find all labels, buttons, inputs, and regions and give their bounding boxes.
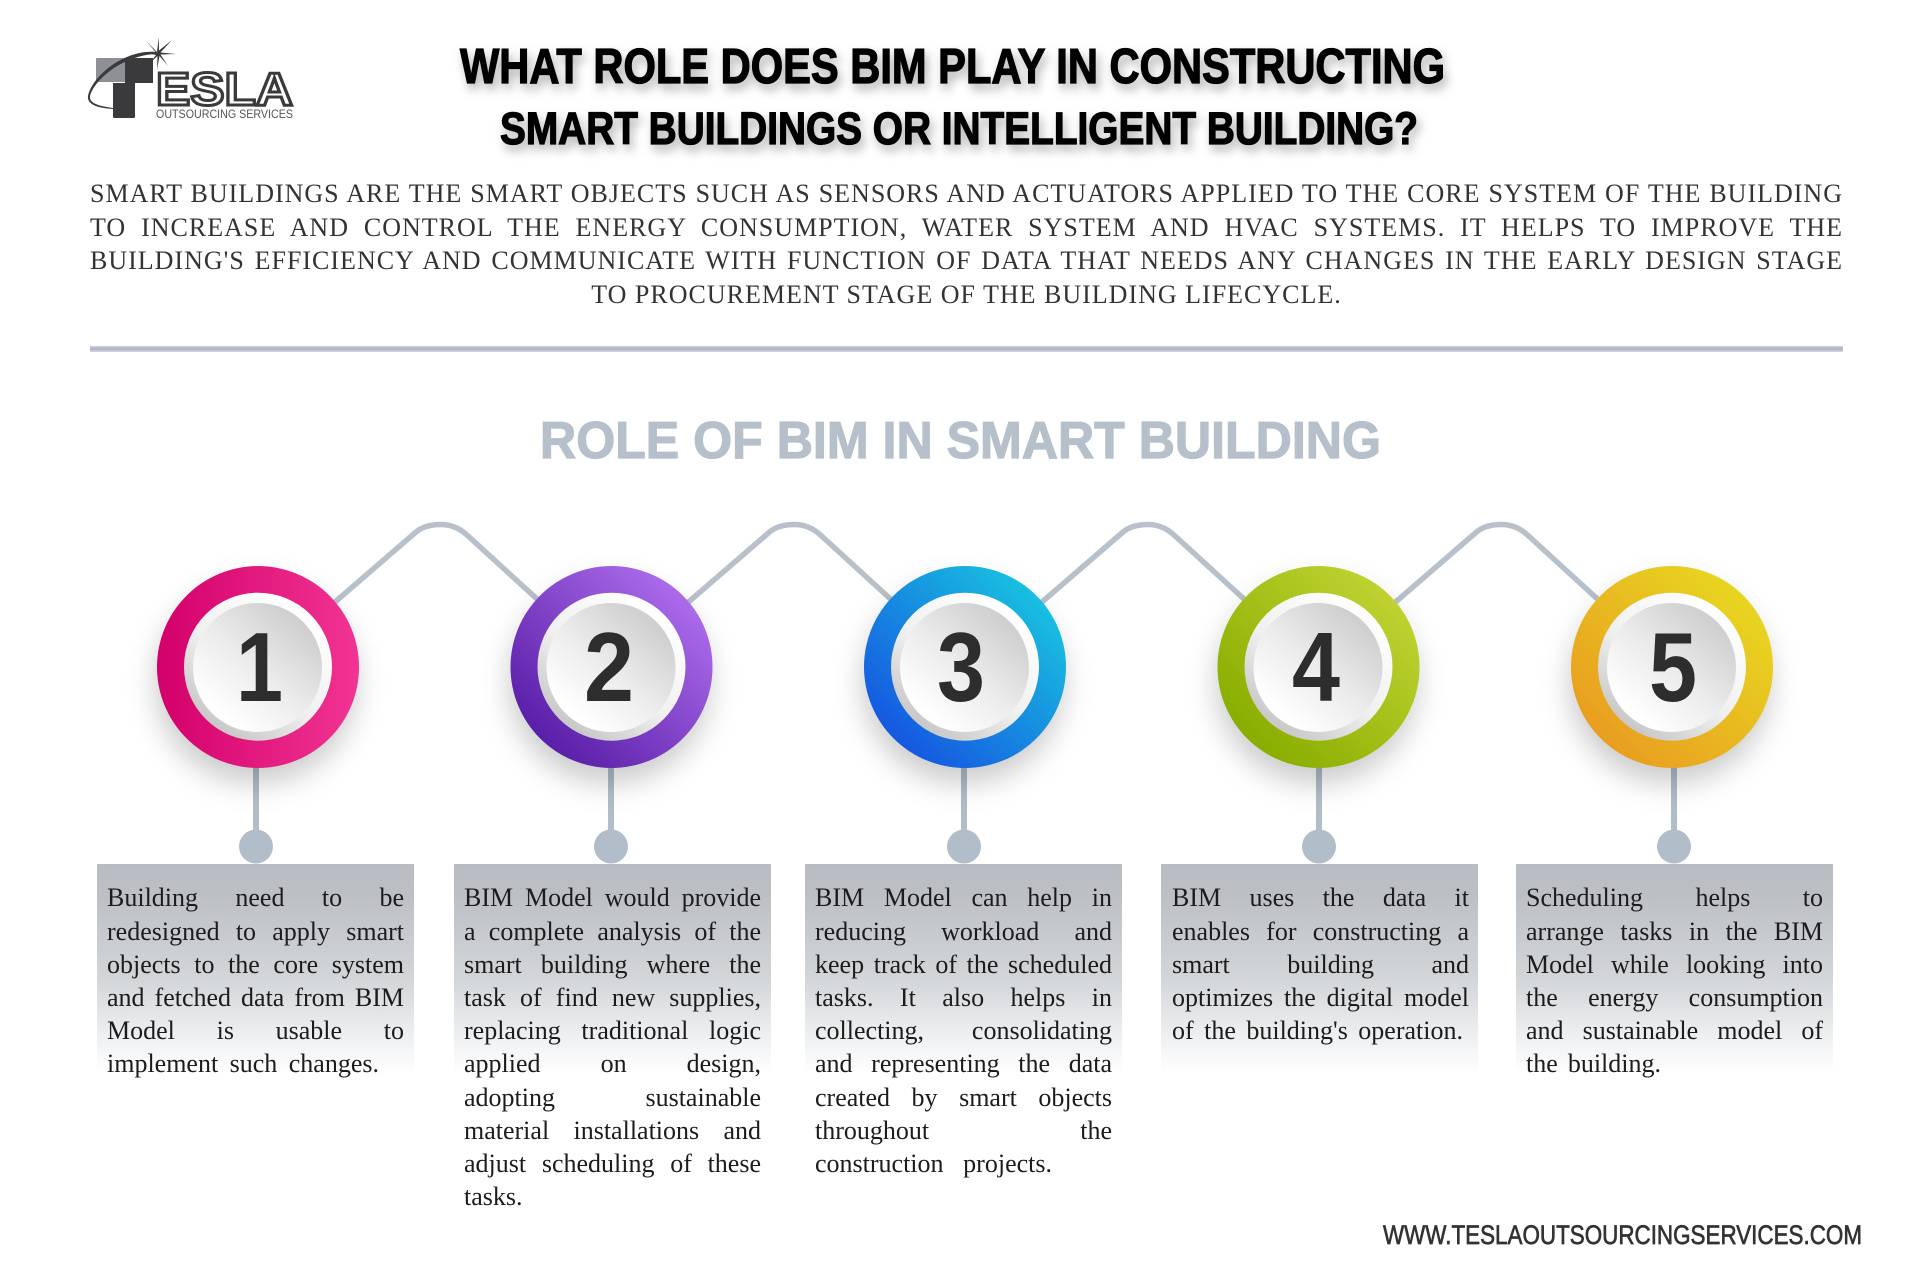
- panel: step 3 text: BIM Model can help in: [815, 883, 1112, 912]
- panel: step 1 text: objects to the core system: [107, 950, 404, 979]
- intro paragraph: BUILDING'S EFFICIENCY AND COMMUNICATE WITH FUNCTION OF DATA THAT NEEDS ANY CHANGES IN THE EARLY DESIGN STAGE: [90, 246, 1843, 275]
- panel: step 1 text: Building need to be: [107, 883, 404, 912]
- panel: step 3 text: construction projects.: [815, 1149, 1052, 1178]
- intro paragraph: [90, 179, 1843, 309]
- panel: step 2 text: task of find new supplies,: [464, 983, 761, 1012]
- panel: step 2 text: adopting sustainable: [464, 1083, 761, 1112]
- step 4 marker: 4: [1292, 612, 1340, 722]
- panel: step 4 text: BIM uses the data it: [1172, 883, 1469, 912]
- panel: step 2 text: BIM Model would provide: [464, 883, 761, 912]
- logo: Tesla Outsourcing Services: [88, 37, 294, 121]
- panel: step 2 text: smart building where the: [464, 950, 761, 979]
- panel: step 3 text: collecting, consolidating: [815, 1016, 1112, 1045]
- panel: step 4 text: [1161, 864, 1478, 1056]
- panel: step 5 text: the building.: [1526, 1049, 1661, 1078]
- panel: step 4 text: optimizes the digital model: [1172, 983, 1469, 1012]
- panel: step 5 text: [1516, 864, 1833, 1078]
- panel: step 3 text: tasks. It also helps in: [815, 983, 1112, 1012]
- panel: step 5 text: and sustainable model of: [1526, 1016, 1823, 1045]
- panel: step 3 text: throughout the: [815, 1116, 1112, 1145]
- panel: step 2 text: [454, 864, 771, 1211]
- panel: step 1 text: redesigned to apply smart: [107, 916, 404, 946]
- panel: step 5 text: Scheduling helps to: [1526, 883, 1823, 912]
- step 1 marker: [157, 566, 359, 864]
- title: [458, 40, 1452, 156]
- logo: Tesla Outsourcing Services: ESLA: [156, 63, 293, 115]
- step 5 marker: 5: [1649, 612, 1697, 722]
- title: SMART BUILDINGS OR INTELLIGENT BUILDING?: [500, 103, 1418, 154]
- panel: step 3 text: keep track of the scheduled: [815, 950, 1112, 979]
- step 3 marker: [864, 566, 1066, 864]
- panel: step 2 text: tasks.: [464, 1182, 522, 1211]
- panel: step 5 text: Model while looking into: [1526, 950, 1823, 979]
- panel: step 2 text: replacing traditional logic: [464, 1016, 761, 1045]
- panel: step 1 text: [97, 864, 414, 1078]
- section heading: ROLE OF BIM IN SMART BUILDING: [540, 412, 1381, 470]
- step 5 marker: [1571, 566, 1773, 864]
- panel: step 2 text: applied on design,: [464, 1049, 761, 1078]
- panel: step 5 text: arrange tasks in the BIM: [1526, 916, 1823, 946]
- panel: step 4 text: of the building's operation.: [1172, 1016, 1463, 1045]
- process timeline: [142, 522, 1784, 864]
- panel: step 1 text: and fetched data from BIM: [107, 983, 404, 1012]
- panel: step 1 text: implement such changes.: [107, 1049, 379, 1078]
- intro paragraph: TO PROCUREMENT STAGE OF THE BUILDING LIFECYCLE.: [591, 280, 1342, 309]
- divider: [90, 346, 1843, 352]
- step 2 marker: [510, 566, 712, 864]
- intro paragraph: TO INCREASE AND CONTROL THE ENERGY CONSUMPTION, WATER SYSTEM AND HVAC SYSTEMS. IT HELPS TO IMPROVE THE: [90, 213, 1843, 242]
- panel: step 4 text: smart building and: [1172, 950, 1469, 979]
- panel: step 3 text: and representing the data: [815, 1049, 1112, 1078]
- panel: step 3 text: reducing workload and: [815, 916, 1112, 946]
- logo: Tesla Outsourcing Services: OUTSOURCING SERVICES: [156, 108, 293, 121]
- panel: step 2 text: a complete analysis of the: [464, 916, 761, 946]
- step 4 marker: [1218, 566, 1420, 864]
- connector lines: [335, 524, 1598, 602]
- step 3 marker: 3: [937, 612, 985, 722]
- panel: step 2 text: adjust scheduling of these: [464, 1149, 761, 1178]
- intro paragraph: SMART BUILDINGS ARE THE SMART OBJECTS SUCH AS SENSORS AND ACTUATORS APPLIED TO THE CORE SYSTEM OF THE BUILDING: [90, 179, 1843, 208]
- panel: step 2 text: material installations and: [464, 1116, 761, 1145]
- panel: step 3 text: created by smart objects: [815, 1083, 1112, 1112]
- panel: step 1 text: Model is usable to: [107, 1016, 404, 1045]
- step 1 marker: 1: [236, 612, 283, 722]
- title: WHAT ROLE DOES BIM PLAY IN CONSTRUCTING: [460, 40, 1445, 94]
- panel: step 5 text: the energy consumption: [1526, 983, 1823, 1012]
- panel: step 4 text: enables for constructing a: [1172, 916, 1469, 946]
- step 2 marker: 2: [584, 612, 634, 722]
- panel: step 3 text: [805, 864, 1122, 1178]
